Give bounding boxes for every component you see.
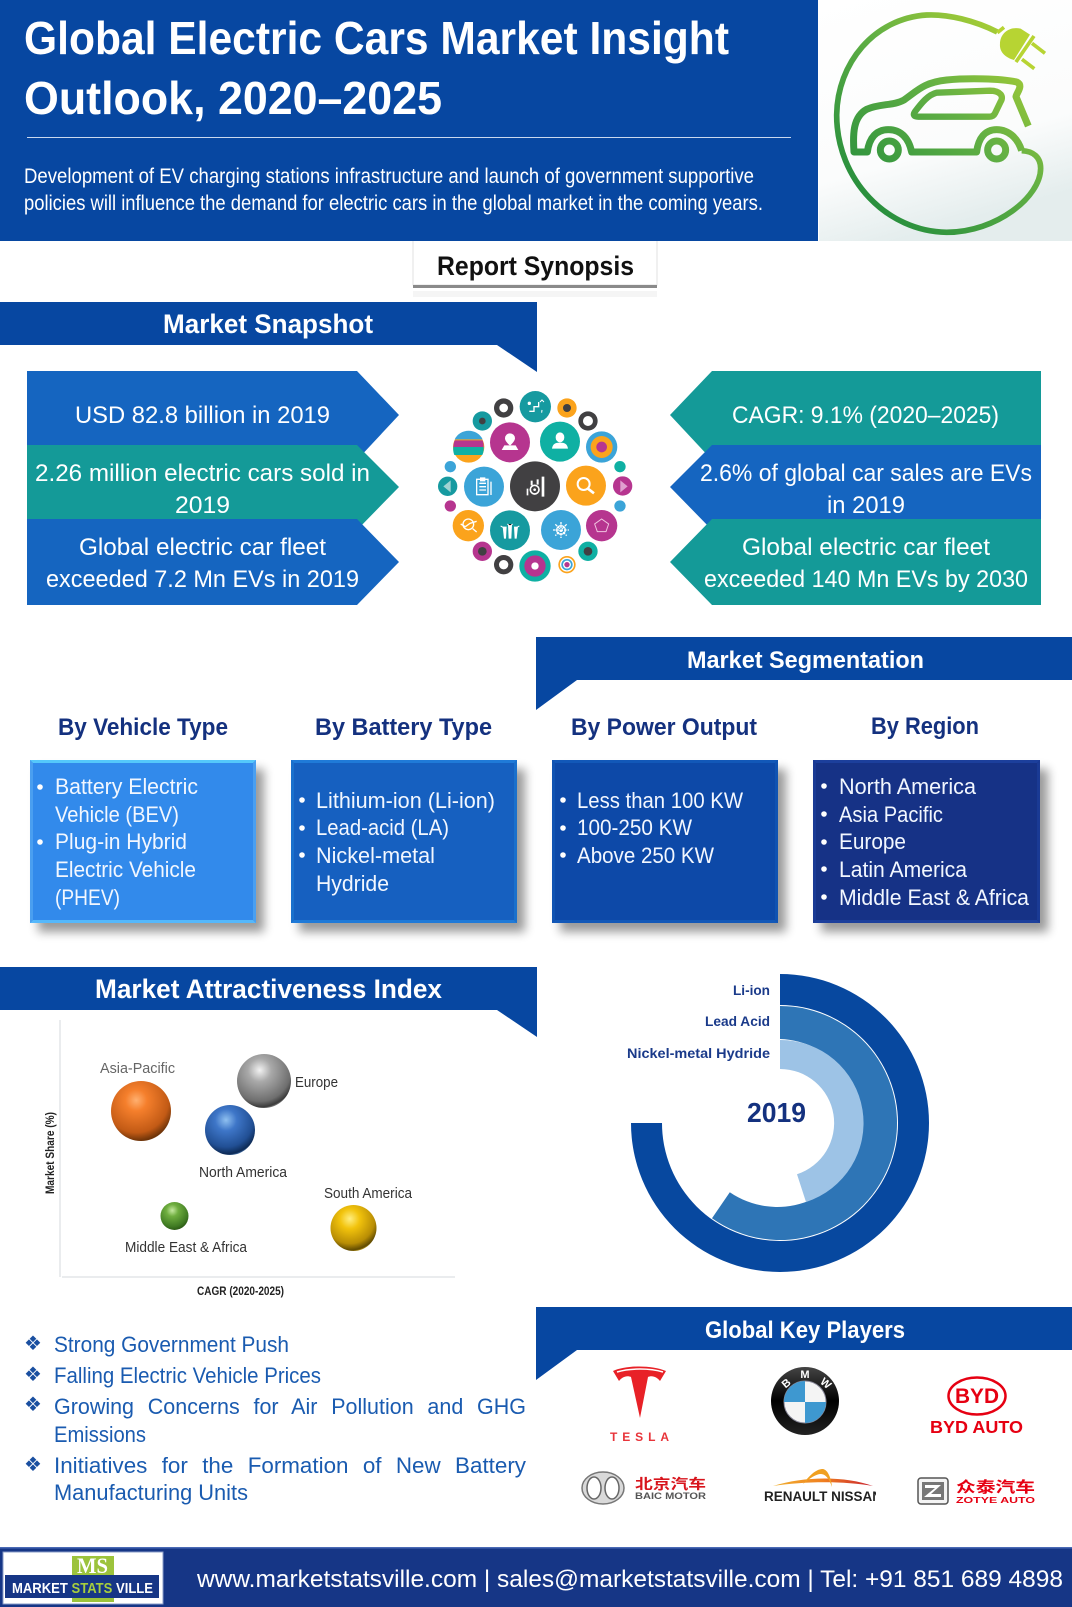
list: market drivers: ❖	[24, 1452, 42, 1476]
banner: market attractiveness index	[0, 967, 537, 1037]
logo: BAIC Motor: 北京汽车	[635, 1476, 706, 1492]
logo: BYD Auto: BYD	[955, 1385, 999, 1408]
box: Lead-acid (LA)	[316, 815, 449, 840]
list: market drivers	[24, 1331, 526, 1505]
button: report synopsis	[413, 241, 657, 297]
title: Outlook, 2020–2025	[24, 72, 442, 124]
title	[24, 12, 729, 124]
bubble: Asia-Pacific	[100, 1061, 175, 1141]
header description: policies will influence the demand for electric cars in the global market in the coming years.	[24, 191, 763, 215]
panel: by battery type	[291, 714, 517, 923]
bubble: Middle East & Africa: Middle East & Africa	[125, 1240, 248, 1256]
arrow: cars sold	[27, 445, 399, 530]
arrow: CAGR: CAGR: 9.1% (2020–2025)	[732, 402, 999, 429]
banner: market segmentation	[536, 637, 1072, 710]
logo: Market Stats Ville: MS	[77, 1553, 108, 1578]
panel: by region	[813, 713, 1040, 923]
box: Above 250 KW	[577, 843, 714, 868]
arrow: CAGR	[670, 371, 1041, 460]
arrow: global fleet	[27, 519, 399, 605]
logo: BMW	[771, 1367, 839, 1435]
title: Global Electric Cars Market Insight	[24, 12, 729, 64]
list: market drivers: Manufacturing Units	[54, 1480, 248, 1505]
box: Hydride	[316, 871, 389, 896]
bubble: North America: North America	[199, 1165, 288, 1181]
box: Middle East & Africa	[839, 885, 1030, 910]
list: market drivers: Initiatives for the Formation of New Battery	[54, 1453, 526, 1478]
button: report synopsis: Report Synopsis	[437, 251, 634, 281]
axis label: CAGR: CAGR (2020-2025)	[197, 1286, 284, 1298]
arrow: EV share	[670, 445, 1041, 530]
list: market drivers: Emissions	[54, 1422, 146, 1447]
logo: BMW: B	[780, 1377, 794, 1391]
logo: Renault Nissan	[764, 1469, 882, 1504]
header banner	[0, 0, 818, 241]
box: Battery Electric	[55, 774, 198, 799]
logo: Zotye Auto: 众泰汽车	[956, 1478, 1035, 1496]
logo: Market Stats Ville	[3, 1552, 163, 1604]
logo: Zotye Auto	[918, 1478, 1036, 1505]
banner: market segmentation: Market Segmentation	[687, 647, 924, 674]
banner: market snapshot: Market Snapshot	[163, 309, 373, 339]
bubble: Middle East & Africa	[125, 1202, 248, 1256]
arrow: market value: USD 82.8 billion in 2019	[75, 402, 330, 429]
icon: electric car with plug	[819, 0, 1072, 241]
chart center year: 2019	[747, 1097, 806, 1128]
banner: global key players	[536, 1307, 1072, 1380]
list: market drivers: ❖	[24, 1362, 42, 1386]
bubble: Europe	[237, 1054, 338, 1108]
panel: by power output	[552, 714, 778, 923]
outer arc: Li-ion	[631, 974, 929, 1272]
logo: Market Stats Ville: MARKET STATS VILLE	[12, 1581, 153, 1597]
box	[552, 760, 778, 923]
list: market drivers: ❖	[24, 1331, 42, 1355]
box: Latin America	[839, 857, 968, 882]
box	[813, 760, 1040, 923]
banner: market snapshot	[0, 302, 537, 372]
list: market drivers: ❖	[24, 1392, 42, 1416]
arrow: cars sold: 2019	[175, 492, 230, 519]
box: Plug-in Hybrid	[55, 829, 187, 854]
bubble: Europe: Europe	[295, 1075, 338, 1091]
banner: market attractiveness index: Market Attractiveness Index	[95, 974, 442, 1004]
box: Lithium-ion (Li-ion)	[316, 788, 495, 813]
box: Electric Vehicle	[55, 857, 196, 882]
arrow: 2030 fleet: Global electric car fleet	[742, 534, 990, 561]
arrow: EV share: 2.6% of global car sales are EVs	[700, 460, 1032, 487]
arrow: global fleet: Global electric car fleet	[79, 534, 326, 561]
heading: By Vehicle Type	[58, 714, 228, 741]
panel: right snapshot arrows	[670, 371, 1041, 605]
bubble: South America	[324, 1186, 413, 1251]
logo: Zotye Auto: ZOTYE AUTO	[956, 1495, 1036, 1505]
logo: BAIC Motor: BAIC MOTOR	[635, 1491, 707, 1501]
arrow: 2030 fleet: exceeded 140 Mn EVs by 2030	[704, 566, 1028, 593]
header description	[24, 164, 763, 215]
arrow: 2030 fleet	[670, 519, 1041, 605]
heading: By Battery Type	[315, 714, 492, 741]
list: market drivers: Growing Concerns for Air Pollution and GHG	[54, 1394, 526, 1419]
arrow: EV share: in 2019	[827, 492, 905, 519]
list: market drivers: Falling Electric Vehicle Prices	[54, 1363, 321, 1388]
header description: Development of EV charging stations infrastructure and launch of government supportive	[24, 164, 754, 188]
contact details: www.marketstatsville.com | sales@marketstatsville.com | Tel: +91 851 689 4898	[196, 1566, 1063, 1593]
logo: BMW: M	[800, 1369, 810, 1381]
logo: BAIC Motor	[582, 1472, 707, 1504]
box: Less than 100 KW	[577, 788, 743, 813]
arrow: market value	[27, 371, 399, 460]
inner arc: Nickel-metal Hydride	[780, 1040, 864, 1202]
label: Lead Acid: Lead Acid	[705, 1013, 770, 1029]
panel: by vehicle type	[30, 714, 256, 923]
arrow: cars sold: 2.26 million electric cars sold in	[35, 460, 370, 487]
box: (PHEV)	[55, 885, 120, 910]
logo: BYD Auto: BYD AUTO	[930, 1417, 1023, 1437]
bubble: Asia-Pacific: Asia-Pacific	[100, 1061, 175, 1077]
logo: BMW: W	[818, 1376, 834, 1392]
box: 100-250 KW	[577, 815, 692, 840]
middle arc: Lead Acid	[712, 1006, 897, 1240]
chart: bubble attractiveness	[45, 1020, 455, 1298]
box: Asia Pacific	[839, 802, 943, 827]
list: market drivers: Strong Government Push	[54, 1332, 289, 1357]
box: North America	[839, 774, 977, 799]
logo: BYD Auto	[930, 1378, 1023, 1437]
chart: radial bar battery type 2019	[627, 974, 929, 1272]
logo: Renault Nissan: RENAULT NISSAN	[764, 1489, 882, 1504]
banner: global key players: Global Key Players	[705, 1317, 905, 1344]
box	[30, 760, 256, 923]
box: Nickel-metal	[316, 843, 435, 868]
bubble: North America	[199, 1105, 288, 1181]
box: Europe	[839, 829, 906, 854]
heading: By Region	[871, 713, 979, 740]
axis label: market share: Market Share (%)	[45, 1112, 57, 1194]
logo: Tesla: TESLA	[610, 1430, 669, 1444]
icon cluster: analytics circles	[438, 391, 632, 582]
footer bar	[0, 1547, 1072, 1607]
bubble: South America: South America	[324, 1186, 413, 1202]
box	[291, 760, 517, 923]
box: Vehicle (BEV)	[55, 802, 179, 827]
panel: left snapshot arrows	[27, 371, 399, 605]
logo: Tesla	[610, 1366, 669, 1444]
heading: By Power Output	[571, 714, 757, 741]
arrow: global fleet: exceeded 7.2 Mn EVs in 2019	[46, 566, 359, 593]
label: Nickel-metal Hydride: Nickel-metal Hydride	[627, 1045, 770, 1061]
label: Li-ion: Li-ion	[733, 982, 770, 998]
